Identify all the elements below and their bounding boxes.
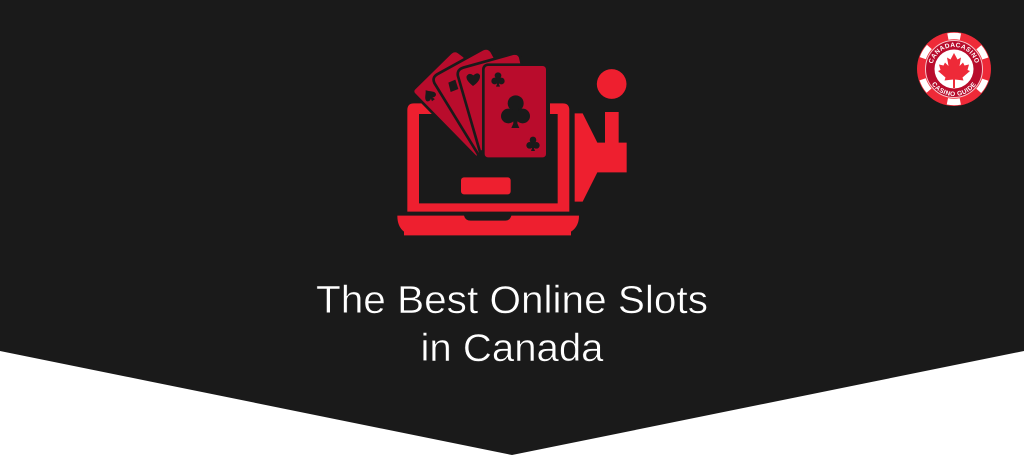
chip white stripes: [921, 36, 987, 102]
title line two: in Canada: [420, 327, 604, 370]
diamond suit: [448, 80, 458, 92]
lever ball: [597, 69, 626, 99]
chip outer edge: [917, 32, 991, 106]
title line one: The Best Online Slots: [316, 279, 708, 322]
heart suit: [466, 73, 480, 86]
maple leaf: [938, 53, 970, 88]
large club suit: [501, 95, 530, 128]
logo: casino chip badge: [917, 32, 991, 106]
laptop screen frame: [407, 103, 569, 212]
chip white centre: [934, 50, 974, 88]
icon: online slot machine laptop with playing cards: [397, 50, 627, 235]
lever arm and side mount: [575, 112, 627, 202]
small bottom club suit: [526, 137, 540, 151]
playing card three: [459, 55, 530, 151]
playing card one: [414, 52, 480, 156]
playing card four: ace of clubs: [485, 66, 546, 157]
title: [316, 279, 708, 370]
laptop base: [397, 216, 579, 235]
small top club suit: [491, 72, 505, 87]
spade suit: [421, 87, 438, 104]
tagline on ring: CASINO GUIDE: [932, 82, 976, 96]
slot button: [461, 177, 511, 194]
playing card two: [435, 50, 520, 153]
brand name on ring: CANADACASINO: [928, 42, 979, 63]
chip inner ring: [926, 40, 982, 98]
